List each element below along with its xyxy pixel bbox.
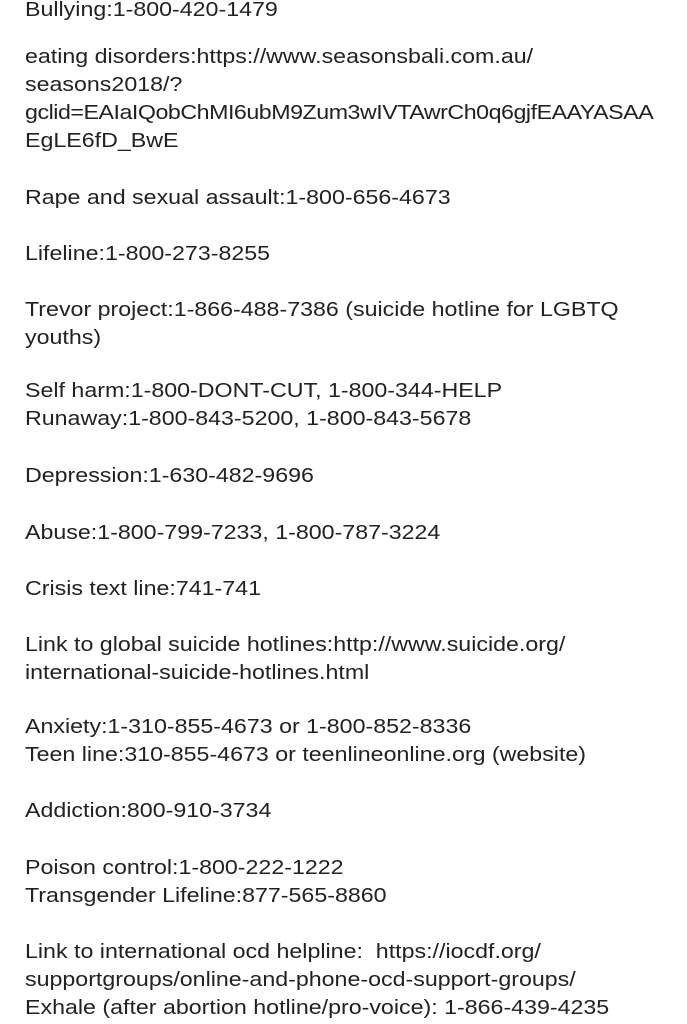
text: self harm and runaway: Runaway:1-800-843-5200, 1-800-843-5678 (25, 408, 471, 430)
text: ocd helpline and exhale: supportgroups/online-and-phone-ocd-support-groups/ (25, 969, 576, 991)
text: eating disorders: EgLE6fD_BwE (25, 130, 178, 152)
text: crisis text line: Crisis text line:741-741 (25, 578, 261, 600)
text: self harm and runaway (25, 380, 502, 430)
text: eating disorders (25, 46, 654, 152)
text: poison control and transgender lifeline: Transgender Lifeline:877-565-8860 (25, 885, 387, 907)
text: rape and sexual assault: Rape and sexual assault:1-800-656-4673 (25, 187, 451, 209)
text: addiction: Addiction:800-910-3734 (25, 800, 271, 822)
text: global suicide hotlines: international-suicide-hotlines.html (25, 662, 369, 684)
text: anxiety and teen line: Teen line:310-855-4673 or teenlineonline.org (website) (25, 744, 586, 766)
text: trevor project: Trevor project:1-866-488-7386 (suicide hotline for LGBTQ (25, 299, 619, 321)
text: depression: Depression:1-630-482-9696 (25, 465, 314, 487)
text: eating disorders: gclid=EAIaIQobChMI6ubM9Zum3wIVTAwrCh0q6gjfEAAYASAA (25, 102, 653, 124)
text: eating disorders: seasons2018/? (25, 74, 182, 96)
text: eating disorders: eating disorders:https://www.seasonsbali.com.au/ (25, 46, 533, 68)
text: lifeline: Lifeline:1-800-273-8255 (25, 243, 270, 265)
text: global suicide hotlines (25, 634, 566, 684)
text: self harm and runaway: Self harm:1-800-DONT-CUT, 1-800-344-HELP (25, 380, 502, 402)
text: anxiety and teen line (25, 716, 586, 766)
text: abuse: Abuse:1-800-799-7233, 1-800-787-3224 (25, 522, 440, 544)
text: poison control and transgender lifeline (25, 857, 387, 907)
text: ocd helpline and exhale (25, 941, 609, 1019)
text: anxiety and teen line: Anxiety:1-310-855-4673 or 1-800-852-8336 (25, 716, 471, 738)
text: ocd helpline and exhale: Exhale (after abortion hotline/pro-voice): 1-866-439-4235 (25, 997, 609, 1019)
text: trevor project (25, 299, 619, 349)
text: poison control and transgender lifeline: Poison control:1-800-222-1222 (25, 857, 344, 879)
text: ocd helpline and exhale: Link to international ocd helpline: https://iocdf.org/ (25, 941, 541, 963)
text: trevor project: youths) (25, 327, 101, 349)
text: global suicide hotlines: Link to global suicide hotlines:http://www.suicide.org/ (25, 634, 565, 656)
